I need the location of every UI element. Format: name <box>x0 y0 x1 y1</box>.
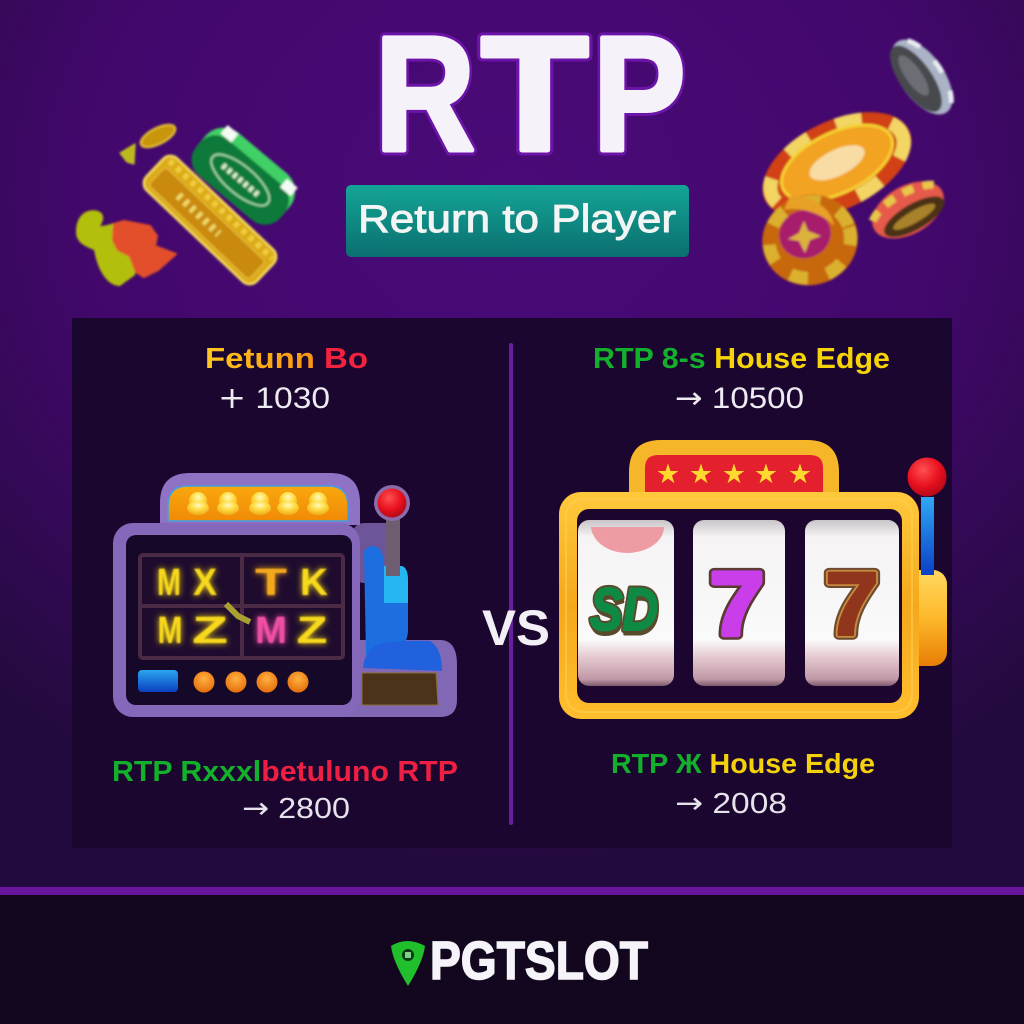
reel grid: Z <box>296 610 328 652</box>
reel grid: M <box>255 610 287 652</box>
icon: large gold and red chip <box>746 90 928 240</box>
reel grid <box>140 555 343 658</box>
title: RTP: P <box>593 3 685 186</box>
lever support <box>352 523 400 583</box>
left column value: + 1030 <box>218 381 330 416</box>
lever <box>374 485 410 576</box>
left bottom value: → 2800 <box>242 791 350 825</box>
reel grid: X <box>193 562 218 604</box>
reel 2: 7 <box>710 555 764 655</box>
coin tray <box>363 641 442 671</box>
reel 1: SD <box>591 580 659 647</box>
stars <box>656 459 812 489</box>
reel 3: 7 <box>825 555 879 655</box>
side handle housing <box>905 570 947 666</box>
reel 1: SD <box>590 576 658 643</box>
stars: ★ <box>689 459 713 489</box>
icon: silver chip <box>879 29 965 125</box>
title: RTP: P <box>593 3 685 186</box>
title: RTP <box>375 2 685 186</box>
stars: ★ <box>788 459 812 489</box>
spin button <box>138 670 178 692</box>
reel 1 <box>578 520 674 686</box>
title: RTP: T <box>481 2 589 185</box>
cabinet <box>113 523 360 717</box>
decoration: left gold bar and casino pieces <box>76 118 305 288</box>
icon: small gold coin <box>137 120 179 152</box>
reel 2: 7 <box>710 555 764 655</box>
screen <box>577 509 902 703</box>
subtitle badge: Return to Player: Return to Player <box>358 198 676 241</box>
reel grid: T <box>255 562 287 604</box>
reel 3: 7 <box>825 555 879 655</box>
title: RTP: R <box>375 3 475 186</box>
reel 3 <box>805 520 899 686</box>
right bottom value: → 2008 <box>675 786 787 820</box>
VS label: VS <box>482 600 550 656</box>
machine topper <box>160 473 360 525</box>
cabinet <box>559 492 919 719</box>
right column heading: RTP 8-s House Edge <box>593 343 890 375</box>
left column heading: Fetunn Bo <box>205 343 368 375</box>
icon: green banknote bundle <box>183 118 305 233</box>
divider line <box>509 343 513 825</box>
reel grid: M <box>157 562 181 604</box>
reel grid: K <box>300 562 329 604</box>
stars: ★ <box>722 459 746 489</box>
lever <box>908 458 946 575</box>
machine topper <box>629 440 839 494</box>
left slot machine <box>113 473 457 717</box>
icon: lower gold and magenta chip <box>750 182 870 298</box>
reel grid: Z <box>192 610 228 652</box>
left bottom label: RTP Rxxxlbetuluno RTP <box>112 756 458 788</box>
stars: ★ <box>754 459 778 489</box>
reel 2 <box>693 520 785 686</box>
icon: yellow-green piece <box>76 210 136 286</box>
payout slot <box>362 673 438 705</box>
decoration: right casino chips <box>746 29 965 298</box>
screen <box>126 535 352 705</box>
base <box>340 640 457 717</box>
title: RTP: T <box>481 2 589 185</box>
reel 1: SD <box>590 576 658 643</box>
icon: gold fragment <box>120 144 135 164</box>
blue side housing <box>364 546 408 655</box>
title: RTP: R <box>375 3 475 186</box>
right bottom label: RTP Ж House Edge <box>611 748 875 779</box>
icon: small red and gold chip <box>862 170 954 250</box>
panel: comparison <box>72 318 952 848</box>
subtitle badge: Return to Player <box>346 185 689 257</box>
right slot machine <box>559 440 947 719</box>
stars: ★ <box>656 459 680 489</box>
icon: red-orange piece <box>113 221 176 277</box>
coin buttons <box>194 672 308 692</box>
reel grid: M <box>158 610 182 652</box>
reel 3: 7 <box>825 555 879 655</box>
footer logo: PGTSLOT: PGTSLOT <box>430 931 648 991</box>
icon: green shield <box>391 941 425 986</box>
footer band <box>0 887 1024 1024</box>
right column value: → 10500 <box>675 381 804 416</box>
icon: gold bar <box>140 152 280 288</box>
